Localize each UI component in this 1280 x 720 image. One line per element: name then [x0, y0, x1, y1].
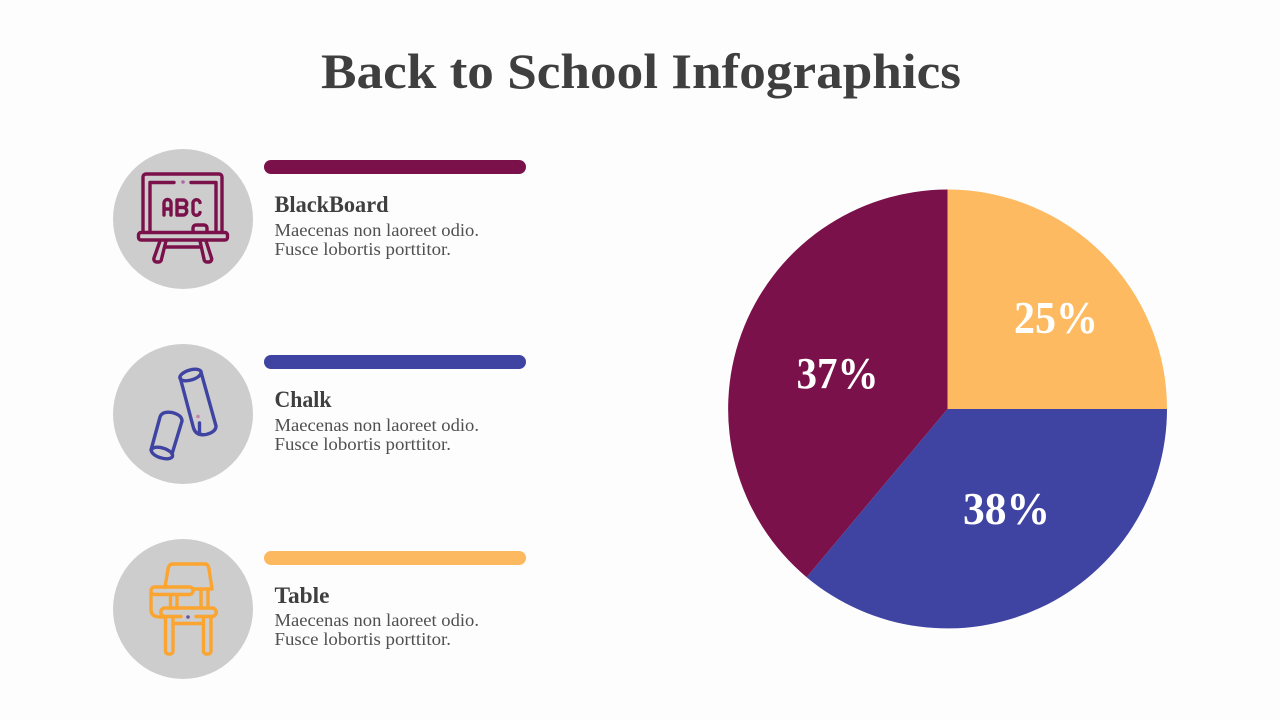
color bar [264, 551, 526, 565]
description: Maecenas non laoreet odio. [274, 415, 479, 435]
color bar [264, 160, 526, 174]
title: Back to School Infographics [321, 43, 961, 99]
slice: 37% [728, 190, 948, 577]
description: Fusce lobortis porttitor. [274, 239, 451, 259]
description: Maecenas non laoreet odio. [274, 610, 479, 630]
description: Fusce lobortis porttitor. [274, 434, 451, 454]
slice: 38% [807, 409, 1167, 628]
label: 25%: 25% [1014, 292, 1098, 343]
heading: Chalk [274, 387, 332, 412]
icon: chalk [113, 344, 253, 484]
slice: 25% [948, 190, 1167, 409]
color bar [264, 355, 526, 369]
heading: BlackBoard [274, 192, 389, 217]
description: Fusce lobortis porttitor. [274, 629, 451, 649]
panel: chalk [113, 344, 526, 484]
heading: Table [274, 583, 330, 608]
panel: blackboard [113, 149, 526, 289]
description [274, 415, 479, 454]
icon: blackboard [113, 149, 253, 289]
label: 38%: 38% [963, 483, 1050, 534]
pie chart [728, 190, 1167, 628]
description [274, 610, 479, 649]
description [274, 220, 479, 259]
panel: table [113, 539, 526, 679]
description: Maecenas non laoreet odio. [274, 220, 479, 240]
icon: school desk [113, 539, 253, 679]
label: 37%: 37% [796, 349, 878, 398]
